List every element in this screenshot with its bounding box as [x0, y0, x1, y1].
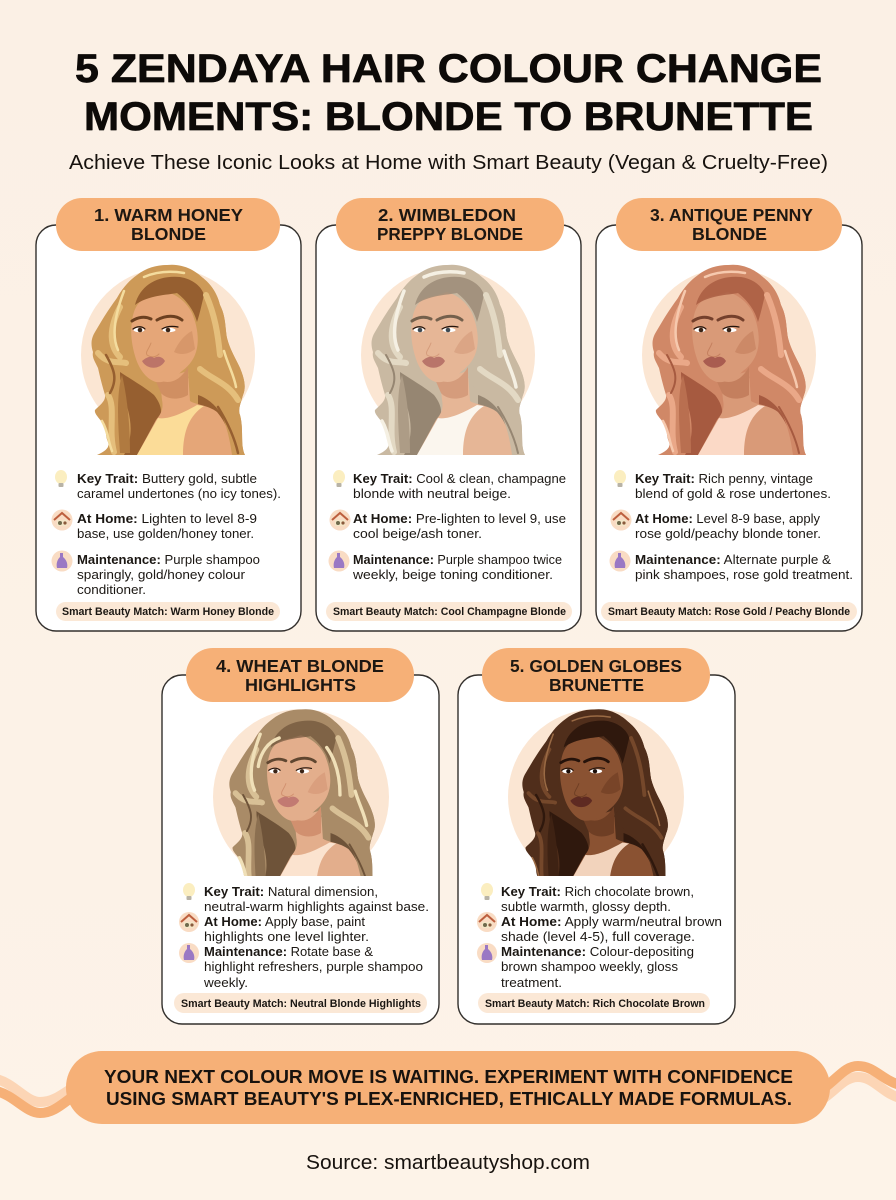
- maintenance: Maintenance: Rotate base &: [204, 945, 374, 959]
- key trait: neutral-warm highlights against base.: [204, 900, 429, 914]
- heading: card 1: BLONDE: [131, 224, 206, 244]
- at home: shade (level 4-5), full coverage.: [501, 930, 695, 944]
- product match: [56, 602, 280, 621]
- key trait: blonde with neutral beige.: [353, 487, 511, 501]
- portrait: wimbledon preppy blonde: [361, 265, 535, 455]
- product match: [478, 993, 710, 1013]
- heading: card 5: [482, 648, 710, 702]
- icon: house: [330, 510, 350, 530]
- at home: At Home: Apply warm/neutral brown: [501, 915, 722, 929]
- at home: [477, 912, 722, 944]
- title: [75, 47, 822, 139]
- maintenance: treatment.: [501, 976, 562, 990]
- product match: Smart Beauty Match: Neutral Blonde Highlights: [181, 998, 421, 1010]
- at home: base, use golden/honey toner.: [77, 527, 254, 541]
- heading: card 1: 1. WARM HONEY: [94, 205, 243, 225]
- heading: card 2: 2. WIMBLEDON: [378, 205, 516, 225]
- key trait: Key Trait: Cool & clean, champagne: [353, 472, 566, 486]
- at home: At Home: Level 8-9 base, apply: [635, 512, 821, 526]
- product match: [174, 993, 427, 1013]
- portrait: antique penny blonde: [642, 265, 816, 455]
- icon: shampoo bottle: [52, 550, 72, 572]
- key trait: caramel undertones (no icy tones).: [77, 487, 281, 501]
- icon: house: [610, 510, 632, 530]
- key trait: [614, 470, 831, 501]
- key trait: Key Trait: Rich penny, vintage: [635, 472, 813, 486]
- icon: house: [477, 912, 497, 932]
- title: 5 ZENDAYA HAIR COLOUR CHANGE: [75, 47, 822, 91]
- at home: cool beige/ash toner.: [353, 527, 482, 541]
- icon: light bulb: [55, 470, 67, 487]
- panel: 3. antique penny blonde: [596, 198, 862, 631]
- source: Source: smartbeautyshop.com: [306, 1152, 590, 1174]
- maintenance: [328, 550, 562, 582]
- icon: light bulb: [333, 470, 345, 487]
- icon: light bulb: [614, 470, 626, 487]
- key trait: Key Trait: Natural dimension,: [204, 885, 378, 899]
- icon: light bulb: [481, 883, 493, 900]
- heading: card 3: 3. ANTIQUE PENNY: [650, 205, 813, 225]
- key trait: Key Trait: Rich chocolate brown,: [501, 885, 694, 899]
- maintenance: [477, 943, 694, 990]
- product match: Smart Beauty Match: Rose Gold / Peachy Blonde: [608, 606, 850, 618]
- maintenance: Maintenance: Colour-depositing: [501, 945, 694, 959]
- at home: At Home: Pre-lighten to level 9, use: [353, 512, 566, 526]
- maintenance: weekly.: [203, 976, 248, 990]
- product match: Smart Beauty Match: Rich Chocolate Brown: [485, 998, 705, 1010]
- heading: card 4: HIGHLIGHTS: [245, 675, 356, 695]
- key trait: [481, 883, 694, 914]
- at home: At Home: Apply base, paint: [204, 915, 366, 929]
- key trait: Key Trait: Buttery gold, subtle: [77, 472, 257, 486]
- panel: 1. warm honey blonde: [36, 198, 301, 631]
- maintenance: weekly, beige toning conditioner.: [352, 568, 553, 582]
- maintenance: [179, 943, 423, 990]
- at home: highlights one level lighter.: [204, 930, 369, 944]
- heading: card 4: 4. WHEAT BLONDE: [216, 656, 384, 676]
- icon: shampoo bottle: [328, 550, 350, 572]
- subtitle: Achieve These Iconic Looks at Home with Smart Beauty (Vegan & Cruelty-Free): [69, 152, 828, 174]
- portrait: warm honey blonde: [81, 265, 255, 455]
- wave ribbons: [0, 1066, 896, 1113]
- maintenance: Maintenance: Purple shampoo: [77, 553, 260, 567]
- portrait: golden globes brunette: [508, 709, 684, 890]
- product match: [326, 602, 572, 621]
- maintenance: brown shampoo weekly, gloss: [501, 960, 678, 974]
- panel: 5. golden globes brunette: [458, 648, 735, 1024]
- call to action banner: [66, 1051, 830, 1124]
- heading: card 5: BRUNETTE: [549, 675, 644, 695]
- maintenance: sparingly, gold/honey colour: [77, 568, 245, 582]
- product match: Smart Beauty Match: Warm Honey Blonde: [62, 606, 274, 618]
- portrait: wheat blonde highlights: [213, 709, 389, 890]
- maintenance: conditioner.: [77, 583, 146, 597]
- panel: 4. wheat blonde highlights: [162, 648, 439, 1024]
- call to action banner: USING SMART BEAUTY'S PLEX-ENRICHED, ETHICALLY MADE FORMULAS.: [106, 1088, 792, 1109]
- at home: [52, 510, 257, 541]
- maintenance: pink shampoes, rose gold treatment.: [635, 568, 853, 582]
- heading: card 2: [336, 198, 564, 251]
- heading: card 3: BLONDE: [692, 224, 767, 244]
- key trait: subtle warmth, glossy depth.: [501, 900, 671, 914]
- heading: card 5: 5. GOLDEN GLOBES: [510, 656, 682, 676]
- product match: [601, 602, 857, 621]
- maintenance: Maintenance: Purple shampoo twice: [353, 553, 562, 567]
- icon: light bulb: [183, 883, 195, 900]
- panel: 2. wimbledon preppy blonde: [316, 198, 581, 631]
- at home: [610, 510, 821, 541]
- heading: card 2: PREPPY BLONDE: [377, 224, 523, 244]
- maintenance: Maintenance: Alternate purple &: [635, 553, 832, 567]
- maintenance: [610, 550, 853, 582]
- key trait: [333, 470, 566, 501]
- call to action banner: YOUR NEXT COLOUR MOVE IS WAITING. EXPERIMENT WITH CONFIDENCE: [104, 1066, 793, 1087]
- icon: house: [52, 510, 72, 530]
- maintenance: highlight refreshers, purple shampoo: [204, 960, 423, 974]
- icon: shampoo bottle: [179, 943, 199, 963]
- maintenance: [52, 550, 260, 597]
- heading: card 3: [616, 198, 842, 251]
- at home: [179, 912, 369, 944]
- icon: house: [179, 912, 199, 932]
- at home: rose gold/peachy blonde toner.: [635, 527, 821, 541]
- heading: card 4: [186, 648, 414, 702]
- key trait: [183, 883, 429, 914]
- heading: card 1: [56, 198, 280, 251]
- key trait: [55, 470, 281, 501]
- at home: [330, 510, 566, 541]
- key trait: blend of gold & rose undertones.: [635, 487, 831, 501]
- icon: shampoo bottle: [477, 943, 497, 963]
- icon: shampoo bottle: [610, 550, 630, 572]
- at home: At Home: Lighten to level 8-9: [77, 512, 257, 526]
- product match: Smart Beauty Match: Cool Champagne Blonde: [333, 606, 566, 618]
- title: MOMENTS: BLONDE TO BRUNETTE: [84, 95, 813, 139]
